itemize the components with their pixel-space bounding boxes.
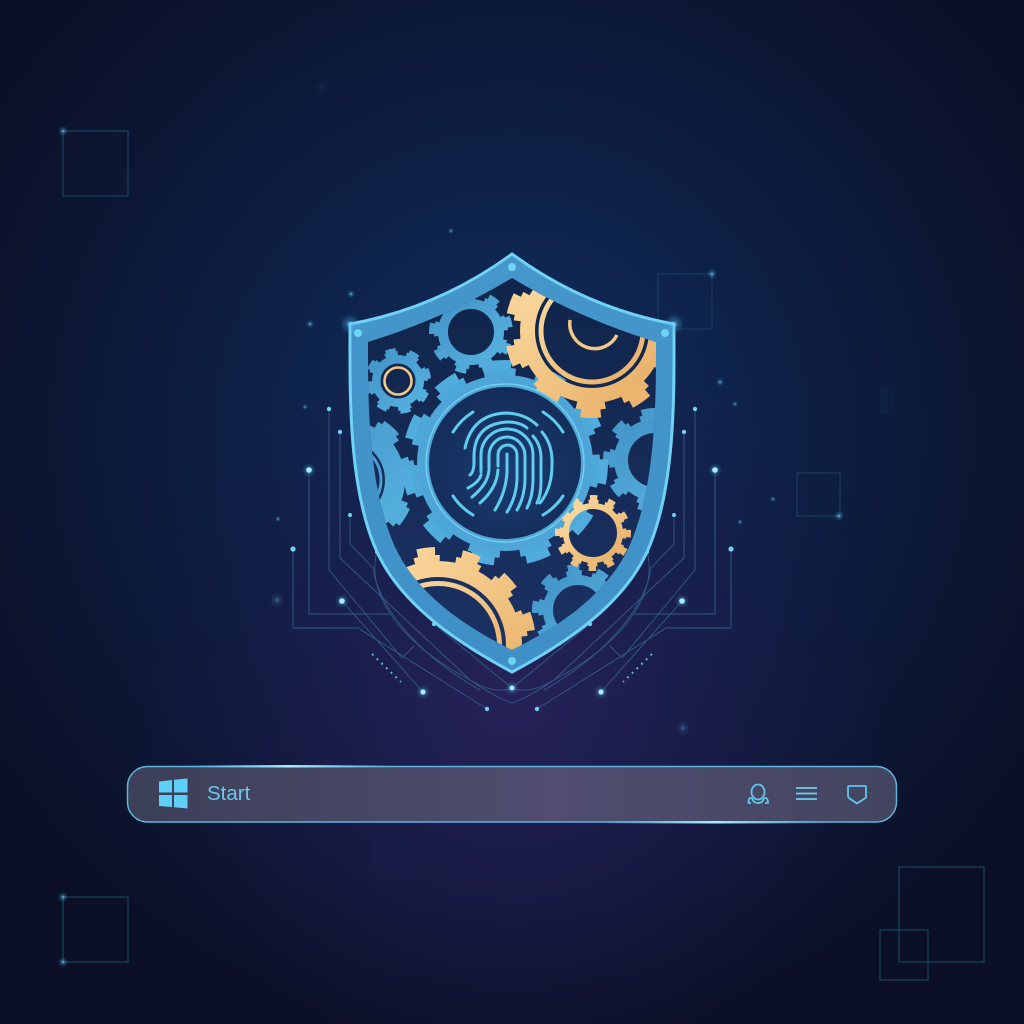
gear: left blue with gold ring	[367, 350, 429, 412]
icon: menu	[796, 788, 817, 799]
shield inner	[368, 278, 656, 650]
fingerprint	[453, 412, 563, 515]
shield rivets	[354, 263, 669, 665]
square: bottom right small	[880, 930, 928, 980]
start bar	[128, 765, 896, 824]
circuit centre node	[505, 681, 519, 695]
icon: user	[748, 784, 768, 803]
start label: Start	[207, 782, 251, 805]
sparkles	[58, 78, 844, 967]
gear: bottom blue	[532, 564, 609, 635]
circuit lines right	[512, 407, 734, 711]
corner glows	[340, 314, 684, 334]
gear: top blue	[432, 293, 510, 371]
square: upper right of shield	[658, 274, 712, 329]
gear: small gold	[558, 498, 628, 568]
gear: left clipped blue	[370, 421, 414, 526]
square: bottom right large	[899, 867, 984, 962]
decorative corner squares	[63, 131, 984, 980]
shield band	[350, 254, 674, 672]
bar bottom sheen	[600, 821, 830, 824]
icon: windows logo	[159, 778, 188, 808]
gear: central blue	[406, 364, 604, 562]
circuit lines left	[290, 407, 512, 711]
gear: right blue	[603, 408, 655, 510]
square: right of shield	[797, 473, 840, 516]
square: bottom left	[63, 897, 128, 962]
bar top sheen	[190, 765, 390, 768]
fingerprint disc	[426, 384, 584, 542]
bar body	[128, 766, 896, 822]
gear: bottom left gold	[406, 547, 535, 650]
shield	[340, 254, 684, 672]
gear: large gold	[506, 290, 656, 418]
icon: chat tag	[848, 786, 866, 804]
square: top left	[63, 131, 128, 196]
gears clipped to shield	[368, 290, 656, 650]
fingerprint outer arcs	[453, 412, 563, 515]
gold arc inside large gear	[570, 320, 617, 349]
